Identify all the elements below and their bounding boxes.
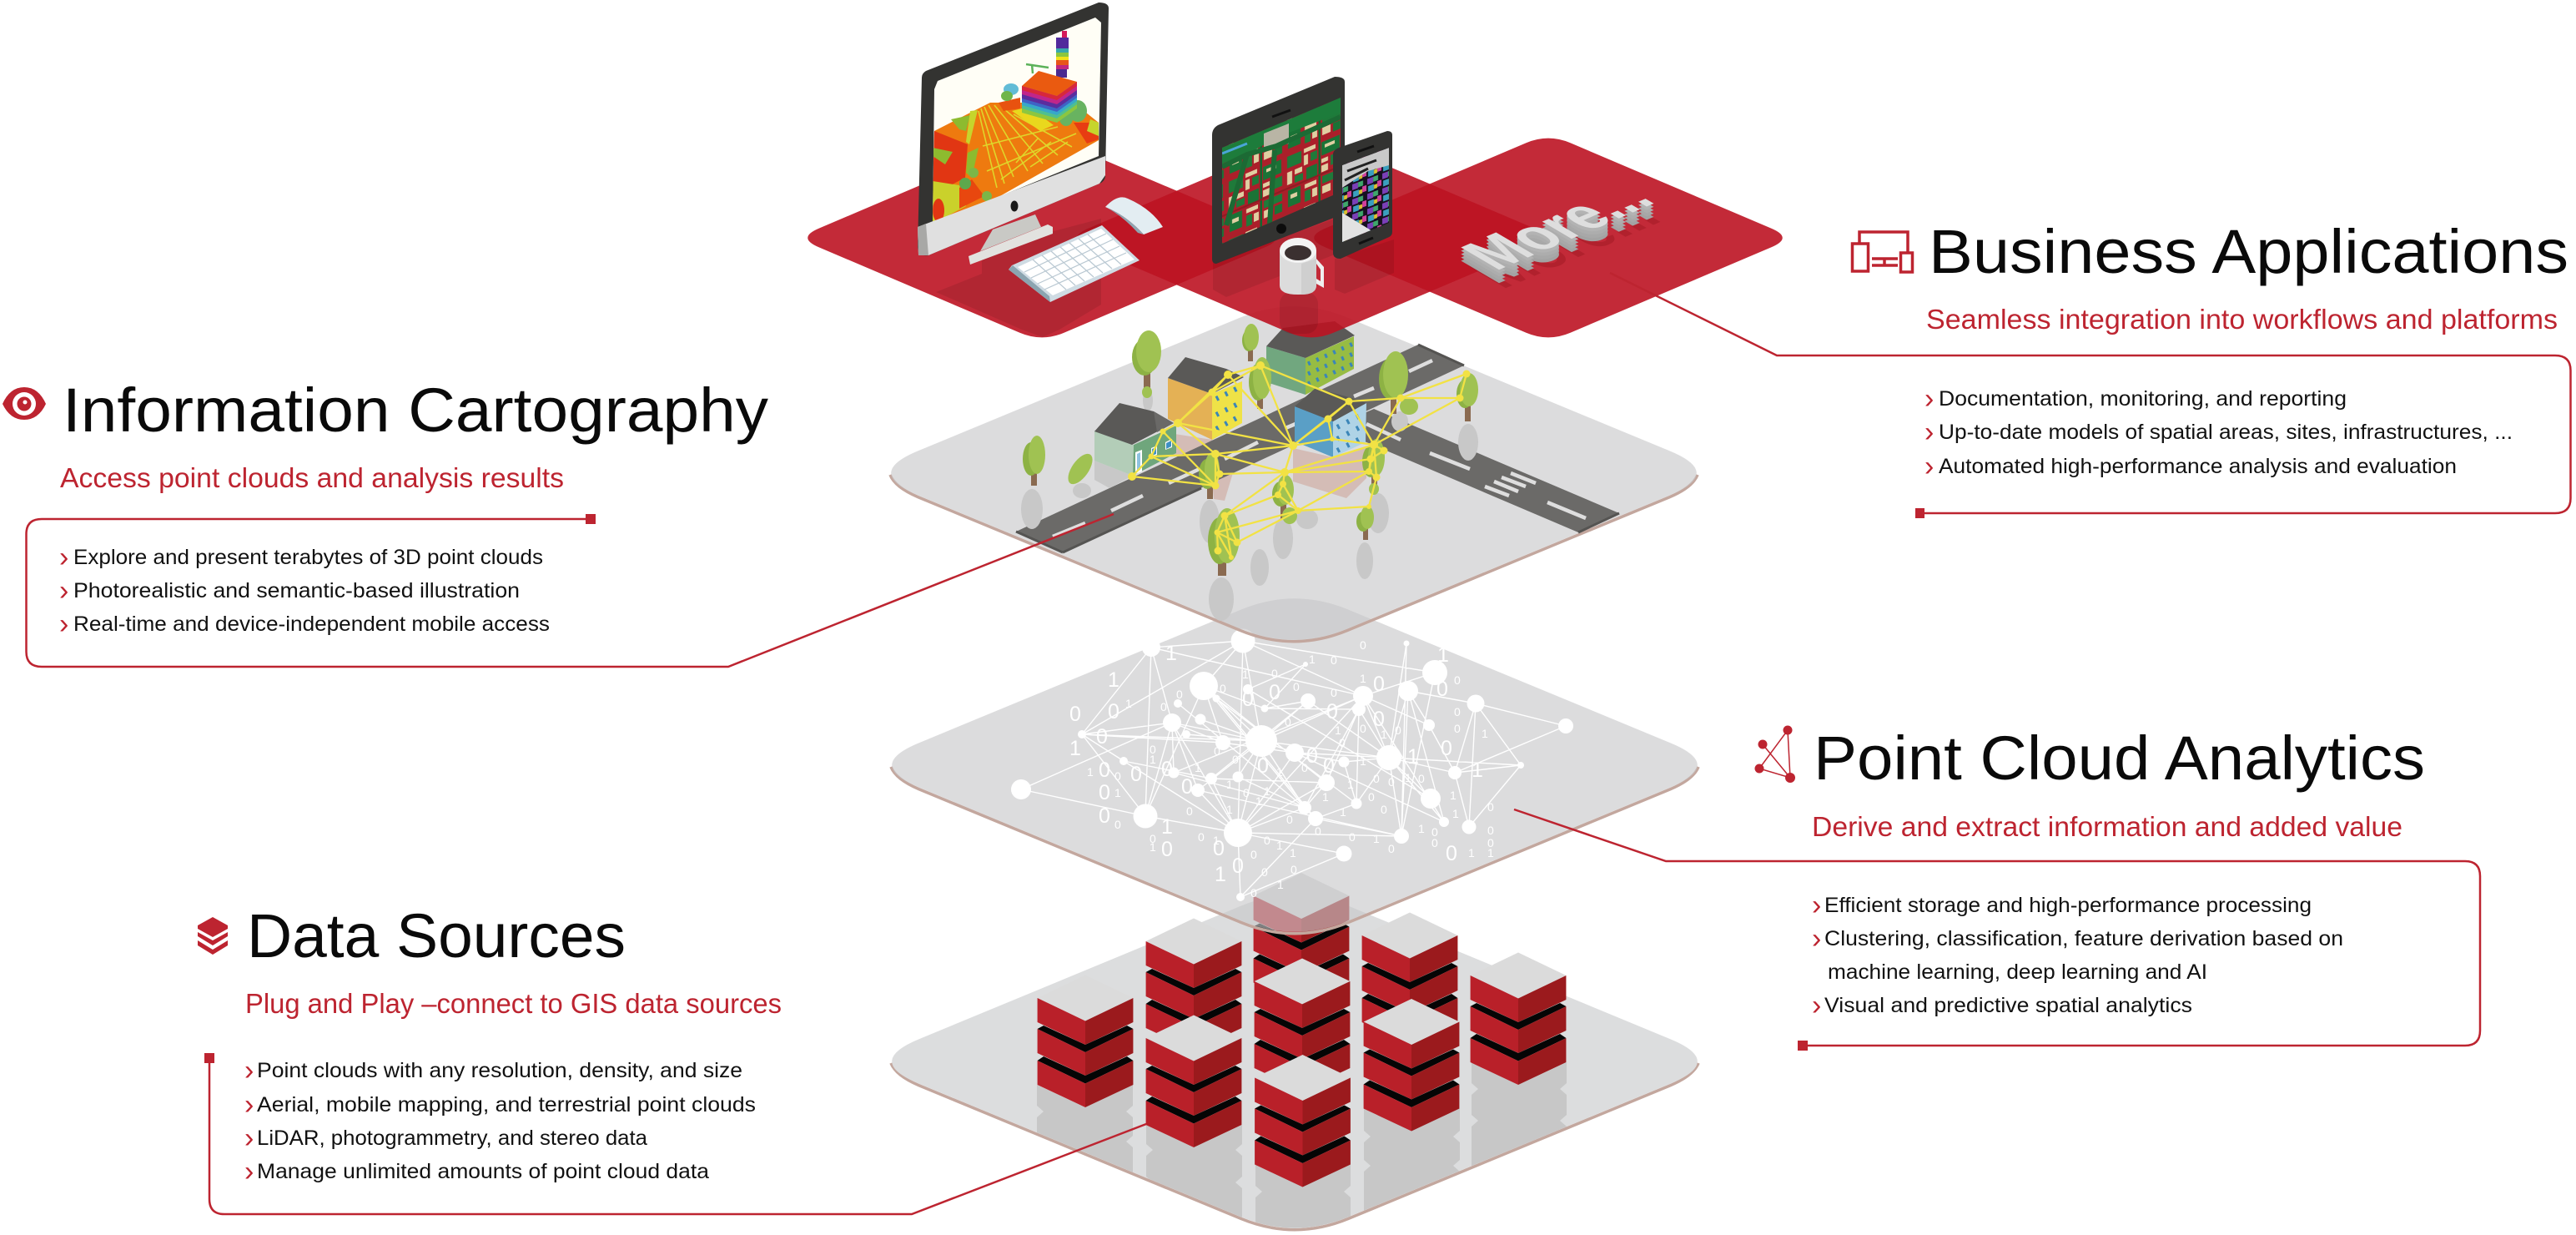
bullet list xyxy=(1812,890,2343,1021)
plate: business applications red layer xyxy=(808,139,1783,337)
bullet list xyxy=(1924,383,2513,482)
icon: mouse xyxy=(1105,197,1163,234)
bullet list: Real-time and device-independent mobile access xyxy=(73,612,550,636)
building: green xyxy=(1094,403,1176,476)
heading: Information Cartography xyxy=(63,376,768,445)
tower shadows on plate xyxy=(1037,1062,1567,1235)
icon: monitor xyxy=(918,3,1109,265)
section: data sources xyxy=(198,901,1146,1214)
building: blue xyxy=(1295,388,1366,457)
tower rainbow xyxy=(1056,38,1069,48)
ground shadows of buildings xyxy=(1168,434,1366,501)
bracket xyxy=(1610,273,2571,518)
bullet list: Automated high-performance analysis and evaluation xyxy=(1939,455,2457,478)
bullet list: › xyxy=(244,1089,254,1121)
neural network graph xyxy=(1011,629,1573,901)
bullet list: LiDAR, photogrammetry, and stereo data xyxy=(257,1127,647,1150)
yellow point cloud network xyxy=(1128,361,1470,560)
bullet list: machine learning, deep learning and AI xyxy=(1828,960,2207,984)
heading: Point Cloud Analytics xyxy=(1814,723,2425,793)
tree shadows xyxy=(1021,390,1478,621)
subtitle: Derive and extract information and added value xyxy=(1812,811,2402,842)
bullet list: Aerial, mobile mapping, and terrestrial point clouds xyxy=(257,1093,756,1117)
bullet list: Visual and predictive spatial analytics xyxy=(1824,994,2192,1017)
plate: analytics layer xyxy=(891,598,1698,934)
server towers xyxy=(1038,873,1566,1187)
label: More...: More... xyxy=(1446,186,1669,292)
device reflections xyxy=(936,219,1394,337)
bullet list: › xyxy=(1924,451,1934,482)
plate: information cartography layer xyxy=(890,306,1698,642)
icon: keyboard xyxy=(1009,225,1140,302)
bullet list: › xyxy=(59,575,68,607)
icon: devices xyxy=(1852,232,1912,272)
icon: phone xyxy=(1333,131,1392,259)
bullet list: Up-to-date models of spatial areas, sites, infrastructures, ... xyxy=(1939,421,2513,444)
subtitle: Access point clouds and analysis results xyxy=(60,462,564,493)
building: yellow xyxy=(1168,357,1244,440)
bullet list: › xyxy=(59,608,68,640)
icon: network xyxy=(1755,726,1795,783)
bullet list: › xyxy=(59,542,68,573)
icon: coffee mug xyxy=(1280,238,1324,295)
bullet list: Explore and present terabytes of 3D point clouds xyxy=(73,546,543,569)
label: More...: More... xyxy=(1446,179,1669,285)
bullet list: › xyxy=(1924,416,1934,448)
building: lime xyxy=(1266,321,1355,395)
section: point cloud analytics xyxy=(1514,723,2480,1051)
label: More...: More... xyxy=(1453,191,1676,297)
label: More...: More... xyxy=(1446,183,1669,289)
bullet list: › xyxy=(1812,890,1821,921)
stepped building xyxy=(1022,104,1077,123)
bullet list: Documentation, monitoring, and reporting xyxy=(1939,387,2347,411)
bullet list: › xyxy=(244,1122,254,1154)
subtitle: Plug and Play –connect to GIS data sources xyxy=(245,988,782,1019)
point cloud on monitor screen xyxy=(933,31,1099,224)
label: More...: More... xyxy=(1446,173,1669,279)
heading: Data Sources xyxy=(247,901,626,970)
bullet list: › xyxy=(1812,923,1821,955)
bullet list: Photorealistic and semantic-based illustration xyxy=(73,579,520,602)
trees xyxy=(1023,324,1478,576)
bracket xyxy=(27,514,1114,667)
icon: layers xyxy=(198,917,228,955)
bullet list xyxy=(59,542,550,640)
bullet list: Clustering, classification, feature derivation based on xyxy=(1824,927,2343,950)
plate: data sources layer xyxy=(891,873,1698,1235)
heading: Business Applications xyxy=(1929,217,2568,286)
bracket xyxy=(1514,809,2480,1051)
section: business applications xyxy=(1610,217,2571,518)
bullet list: › xyxy=(244,1055,254,1086)
subtitle: Seamless integration into workflows and platforms xyxy=(1926,304,2558,335)
bullet list: › xyxy=(244,1156,254,1187)
bullet list xyxy=(244,1055,756,1187)
binary digits large: 0010100000000001000100000100111 xyxy=(1069,642,1483,886)
map on tablet screen xyxy=(1222,98,1341,225)
label: More...: More... xyxy=(1446,176,1669,282)
bullet list: › xyxy=(1924,383,1934,415)
bracket xyxy=(204,1053,1146,1214)
icon: tablet xyxy=(1212,77,1345,264)
bullet list: › xyxy=(1812,990,1821,1021)
bullet list: Manage unlimited amounts of point cloud data xyxy=(257,1160,709,1183)
street with crossing xyxy=(1016,345,1619,552)
binary digits small: 0100101001001101001010010010110100101001001010010010100101000101101001010110 xyxy=(1087,638,1494,900)
icon: eye xyxy=(3,387,46,420)
bullet list: Point clouds with any resolution, density, and size xyxy=(257,1059,742,1082)
section: information cartography xyxy=(3,376,1114,667)
bullet list: Efficient storage and high-performance processing xyxy=(1824,894,2312,917)
